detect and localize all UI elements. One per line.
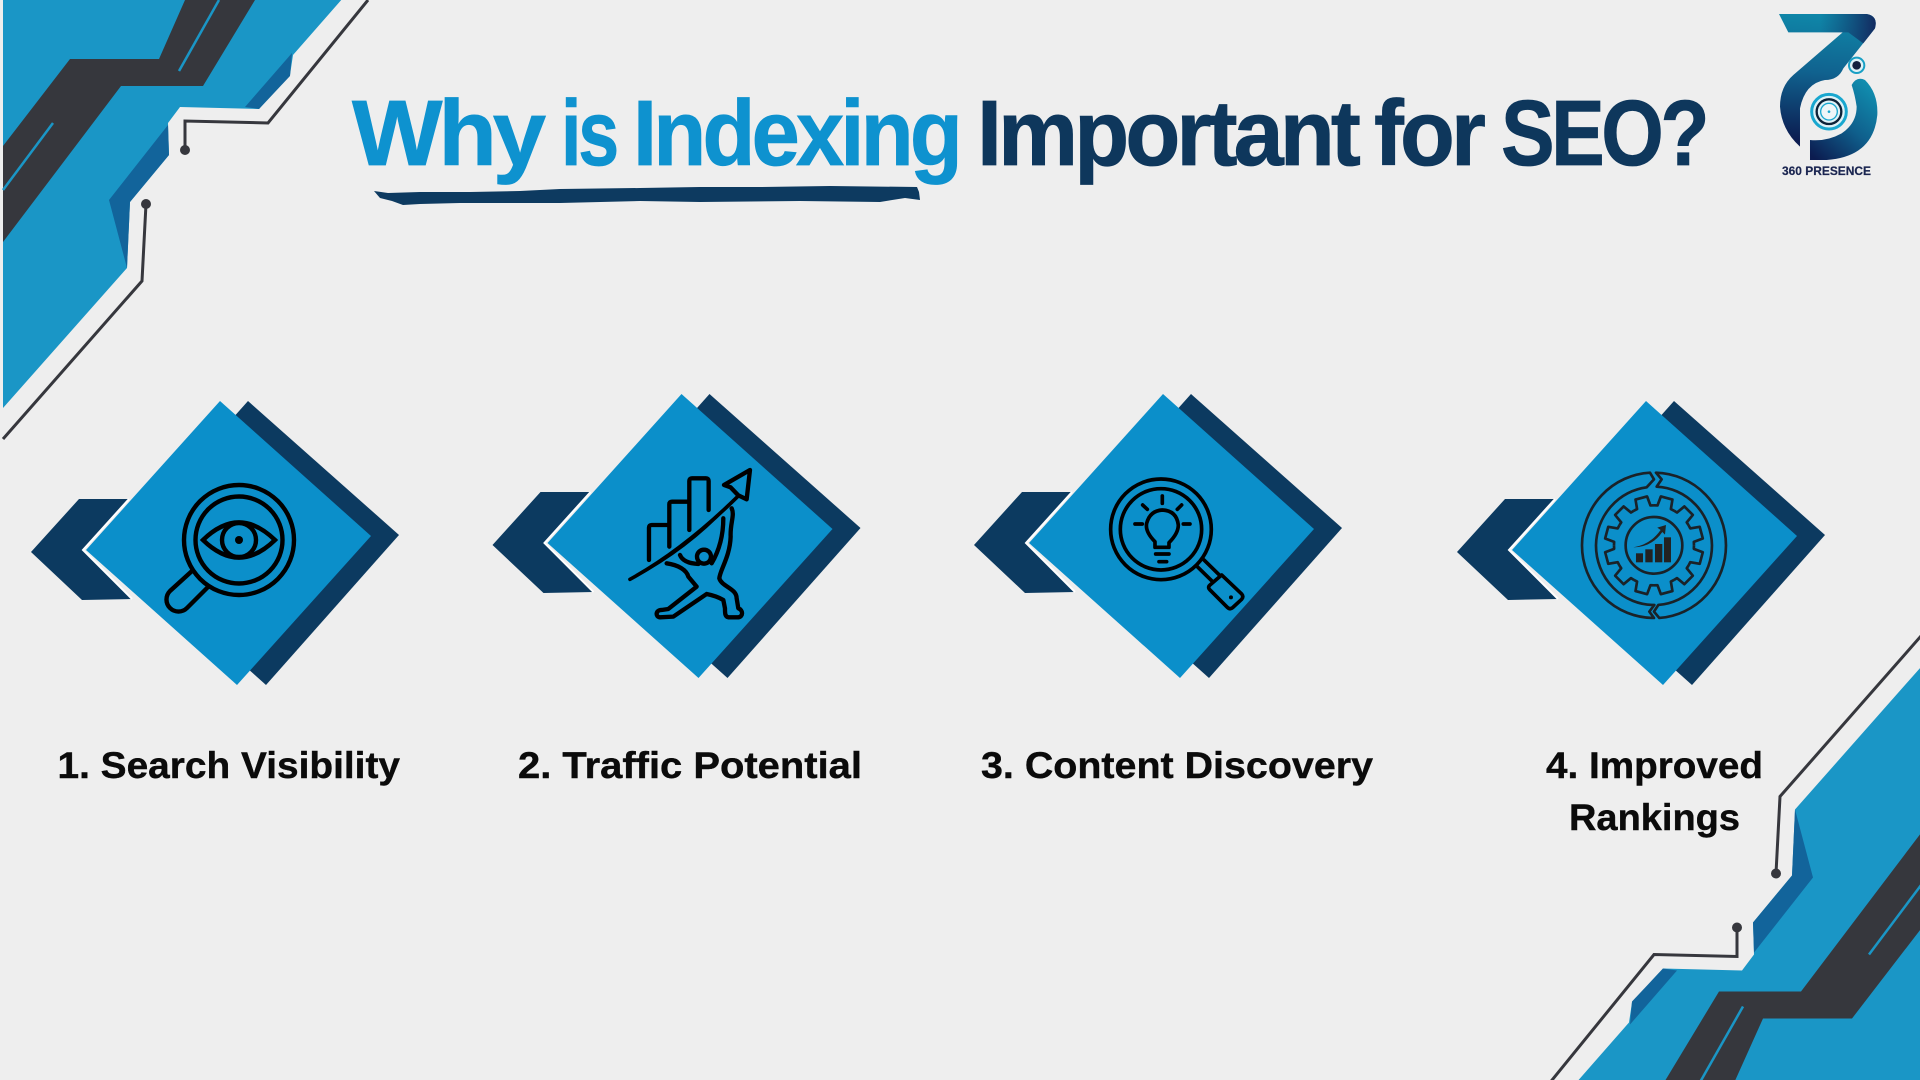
card 1 label: 1. Search Visibility: [58, 745, 400, 786]
card 2 label: 2. Traffic Potential: [518, 745, 862, 786]
card 4 label: 4. Improved: [1546, 745, 1763, 786]
logo: 360 Presence: [1779, 14, 1877, 178]
title: is: [561, 81, 616, 185]
title: Why: [352, 81, 546, 185]
card 4 label: Rankings: [1569, 797, 1740, 838]
logo: 360 Presence: 360 PRESENCE: [1782, 166, 1871, 178]
decoration: top-left corner: [3, 0, 368, 439]
card 3: content discovery diamond: [974, 394, 1342, 678]
card 2: traffic potential diamond: [492, 394, 860, 678]
icon: person lifting growth chart: [630, 470, 750, 617]
title underline brush stroke: [374, 186, 920, 205]
card 1: search visibility diamond: [31, 401, 399, 685]
title: Indexing: [633, 81, 959, 185]
icon: magnifier with light bulb: [1111, 479, 1243, 609]
title: Important: [977, 81, 1360, 185]
card 3 label: 3. Content Discovery: [981, 745, 1373, 786]
title: [352, 81, 1706, 185]
icon: magnifier with eye: [166, 485, 294, 612]
decoration: bottom-right corner: [1546, 624, 1920, 1080]
card 4 label: [1546, 745, 1763, 838]
card 4: improved rankings diamond: [1457, 401, 1825, 685]
title: for: [1374, 81, 1485, 185]
icon: gear with rising chart: [1582, 473, 1726, 618]
title: SEO?: [1501, 81, 1706, 185]
